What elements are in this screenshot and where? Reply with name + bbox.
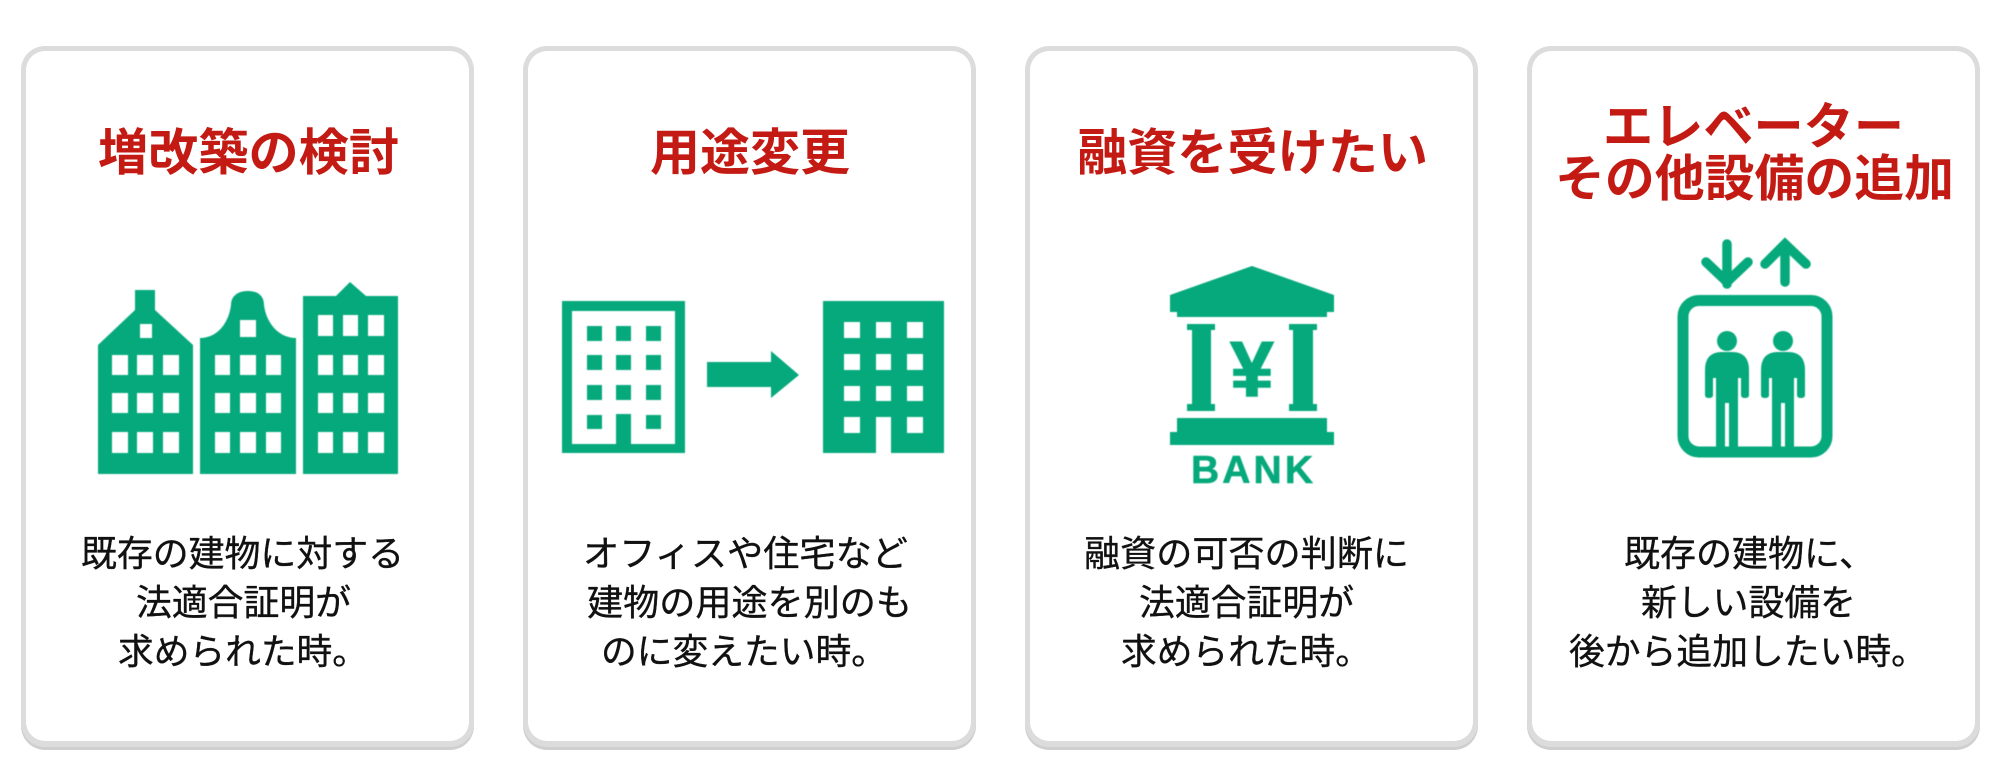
icon: bank with yen: ¥ <box>1230 325 1274 413</box>
panel: エレベーターその他設備の追加 <box>1527 46 1980 750</box>
heading: エレベーター <box>1603 99 1904 155</box>
icon: bank with yen <box>1170 266 1334 492</box>
body text <box>1084 533 1409 672</box>
heading: 増改築の検討 <box>98 125 399 181</box>
body text: 法適合証明が <box>136 582 351 623</box>
icon: solid building <box>823 301 944 453</box>
body text: 融資の可否の判断に <box>1084 533 1409 574</box>
arrow: change of use <box>707 351 799 398</box>
body text: 既存の建物に、 <box>1624 533 1875 574</box>
icon: elevator <box>1683 244 1827 452</box>
heading: その他設備の追加 <box>1555 151 1954 207</box>
panel: 用途変更 <box>523 46 976 750</box>
icon: outlined building <box>562 301 685 453</box>
body text: 建物の用途を別のも <box>587 582 912 623</box>
body text: のに変えたい時。 <box>601 631 887 672</box>
body text <box>583 533 912 672</box>
icon: bank with yen: BANK <box>1191 449 1313 492</box>
body text: 求められた時。 <box>1121 631 1371 672</box>
body text: 後から追加したい時。 <box>1569 631 1927 672</box>
body text <box>81 533 404 672</box>
heading: 融資を受けたい <box>1077 125 1428 181</box>
body text: 法適合証明が <box>1139 582 1354 623</box>
heading: 用途変更 <box>650 125 850 181</box>
icon: three townhouses <box>98 282 398 474</box>
body text: 新しい設備を <box>1641 582 1856 623</box>
heading <box>1555 99 1954 207</box>
panel: 融資を受けたい <box>1025 46 1478 750</box>
panel: 増改築の検討 <box>21 46 474 750</box>
body text: 求められた時。 <box>118 631 368 672</box>
body text <box>1569 533 1927 672</box>
body text: 既存の建物に対する <box>81 533 404 574</box>
body text: オフィスや住宅など <box>583 533 908 574</box>
